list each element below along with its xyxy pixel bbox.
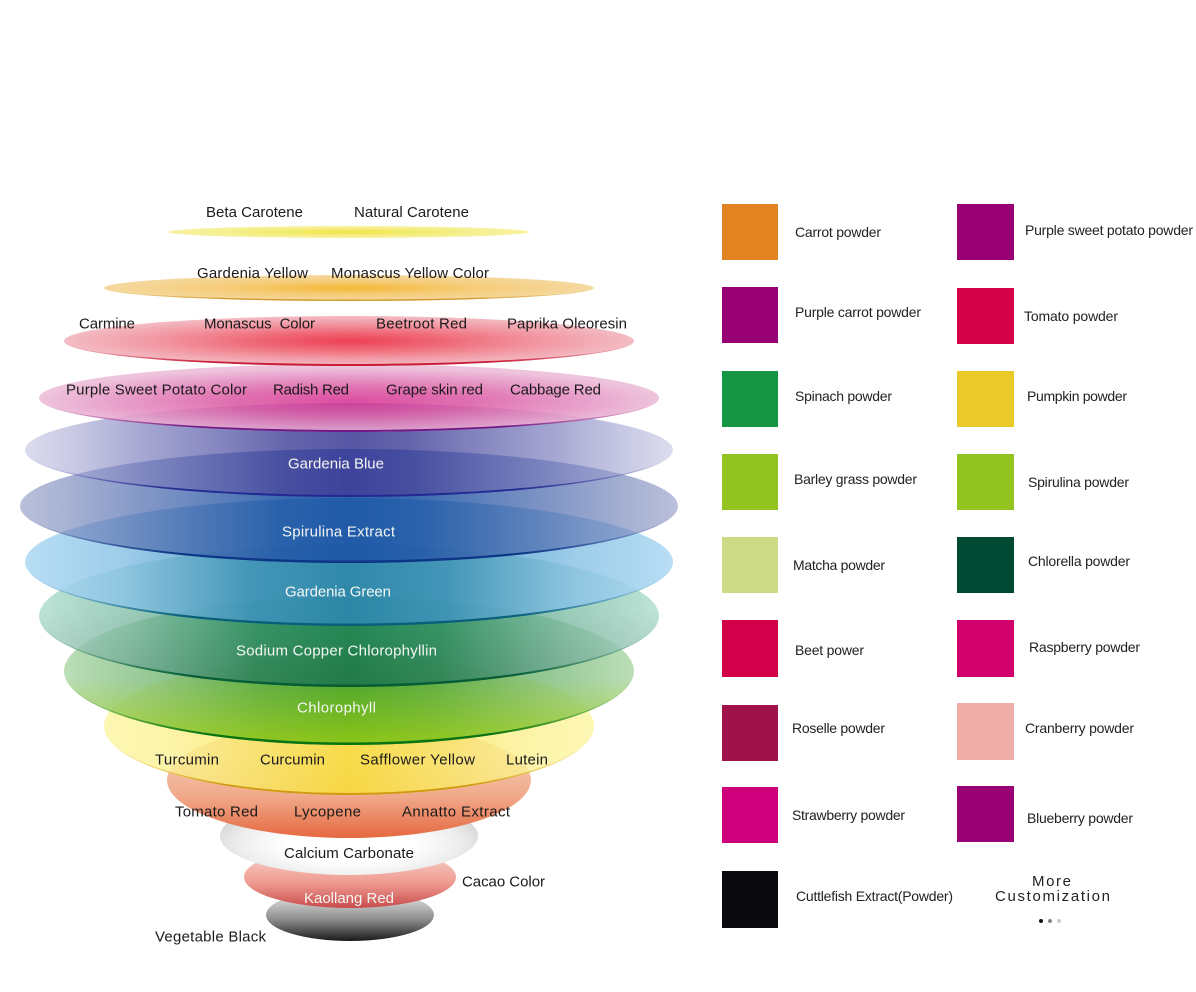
swatch: Pumpkin powder: Pumpkin powder [1027,388,1127,404]
layer: purple and magenta colorants [39,364,659,432]
label: Cabbage Red: Cabbage Red [510,382,601,399]
layer: chlorophyll and copper chlorophyllin [64,597,634,745]
swatch: Spinach powder [722,371,892,427]
swatch: Cuttlefish Extract(Powder) [722,871,953,928]
stack labels [66,204,627,946]
swatch: Purple sweet potato powder [957,204,1193,260]
layer: vegetable black [266,889,434,941]
swatch: Spirulina powder [957,454,1129,510]
swatch: Matcha powder [722,537,885,593]
swatch: Carrot powder [722,204,881,260]
label: Gardenia Green: Gardenia Green [285,584,391,601]
layer: red colorants [64,316,634,366]
label: Radish Red: Radish Red [273,382,349,399]
label: Purple Sweet Potato Color: Purple Sweet Potato Color [66,382,247,399]
swatch: Barley grass powder: Barley grass powder [794,471,917,487]
label: Sodium Copper Chlorophyllin: Sodium Copper Chlorophyllin [236,643,437,660]
layer: gardenia blue [25,403,673,497]
more customization note [995,873,1110,923]
text: More Customization: More [1032,873,1071,890]
swatch: Tomato powder: Tomato powder [1024,308,1118,324]
label: Carmine: Carmine [79,316,135,333]
label: Calcium Carbonate: Calcium Carbonate [284,845,414,862]
swatch: Roselle powder: Roselle powder [792,720,885,736]
label: Chlorophyll: Chlorophyll [297,700,376,717]
layer: orange-yellow colorants [104,275,594,301]
swatch: Beet power [722,620,864,677]
label: Safflower Yellow: Safflower Yellow [360,752,475,769]
swatch: Raspberry powder: Raspberry powder [1029,639,1140,655]
swatch: Strawberry powder [722,787,905,843]
layer: spirulina extract [20,449,678,563]
label: Tomato Red: Tomato Red [175,804,258,821]
swatch: Purple carrot powder [722,287,921,343]
swatch legend: column 1 [722,204,953,928]
swatch: Beet power: Beet power [795,642,864,658]
swatch: Strawberry powder: Strawberry powder [792,807,905,823]
label: Turcumin: Turcumin [155,752,219,769]
label: Monascus Yellow Color: Monascus Yellow Color [331,265,489,282]
layer: yellow colorants [104,657,594,795]
swatch legend: column 2 [957,204,1193,842]
layer: carotene [168,226,530,238]
swatch: Purple sweet potato powder: Purple sweet potato powder [1025,222,1193,238]
label: Beta Carotene: Beta Carotene [206,204,303,221]
swatch: Spirulina powder: Spirulina powder [1028,474,1129,490]
label: Curcumin: Curcumin [260,752,325,769]
text: More Customization: Customization [995,888,1110,905]
swatch: Cuttlefish Extract(Powder): Cuttlefish Extract(Powder) [796,888,953,904]
swatch: Purple carrot powder: Purple carrot powder [795,304,921,320]
swatch: Matcha powder: Matcha powder [793,557,885,573]
icon: ellipsis dots [1039,919,1061,923]
swatch: Roselle powder [722,705,885,761]
layer: calcium carbonate [220,797,478,875]
swatch: Raspberry powder [957,620,1140,677]
label: Spirulina Extract: Spirulina Extract [282,524,396,541]
label: Grape skin red: Grape skin red [386,382,483,399]
swatch: Pumpkin powder [957,371,1127,427]
label: Beetroot Red: Beetroot Red [376,316,467,333]
colorant layer stack [20,226,678,941]
layer: tomato red and lycopene [167,722,531,838]
swatch: Blueberry powder [957,786,1133,842]
label: Cacao Color: Cacao Color [462,874,545,891]
swatch: Cranberry powder [957,703,1134,760]
label: Vegetable Black: Vegetable Black [155,929,266,946]
swatch: Carrot powder: Carrot powder [795,224,881,240]
text: More Customization [995,873,1110,905]
label: Gardenia Yellow: Gardenia Yellow [197,265,308,282]
swatch: Tomato powder [957,288,1118,344]
swatch: Blueberry powder: Blueberry powder [1027,810,1133,826]
label: Kaollang Red: Kaollang Red [304,890,394,907]
label: Monascus Color: Monascus Color [204,316,315,333]
swatch: Spinach powder: Spinach powder [795,388,892,404]
label: Annatto Extract: Annatto Extract [402,804,511,821]
layer: kaoliang red [244,846,456,908]
swatch: Cranberry powder: Cranberry powder [1025,720,1134,736]
label: Lycopene: Lycopene [294,804,361,821]
label: Paprika Oleoresin: Paprika Oleoresin [507,316,627,333]
label: Natural Carotene: Natural Carotene [354,204,469,221]
label: Gardenia Blue: Gardenia Blue [288,456,384,473]
label: Lutein: Lutein [506,752,548,769]
swatch: Chlorella powder: Chlorella powder [1028,553,1130,569]
swatch: Chlorella powder [957,537,1130,593]
layer: gardenia green [39,545,659,687]
layer: spirulina light blue [25,498,673,626]
swatch: Barley grass powder [722,454,917,510]
